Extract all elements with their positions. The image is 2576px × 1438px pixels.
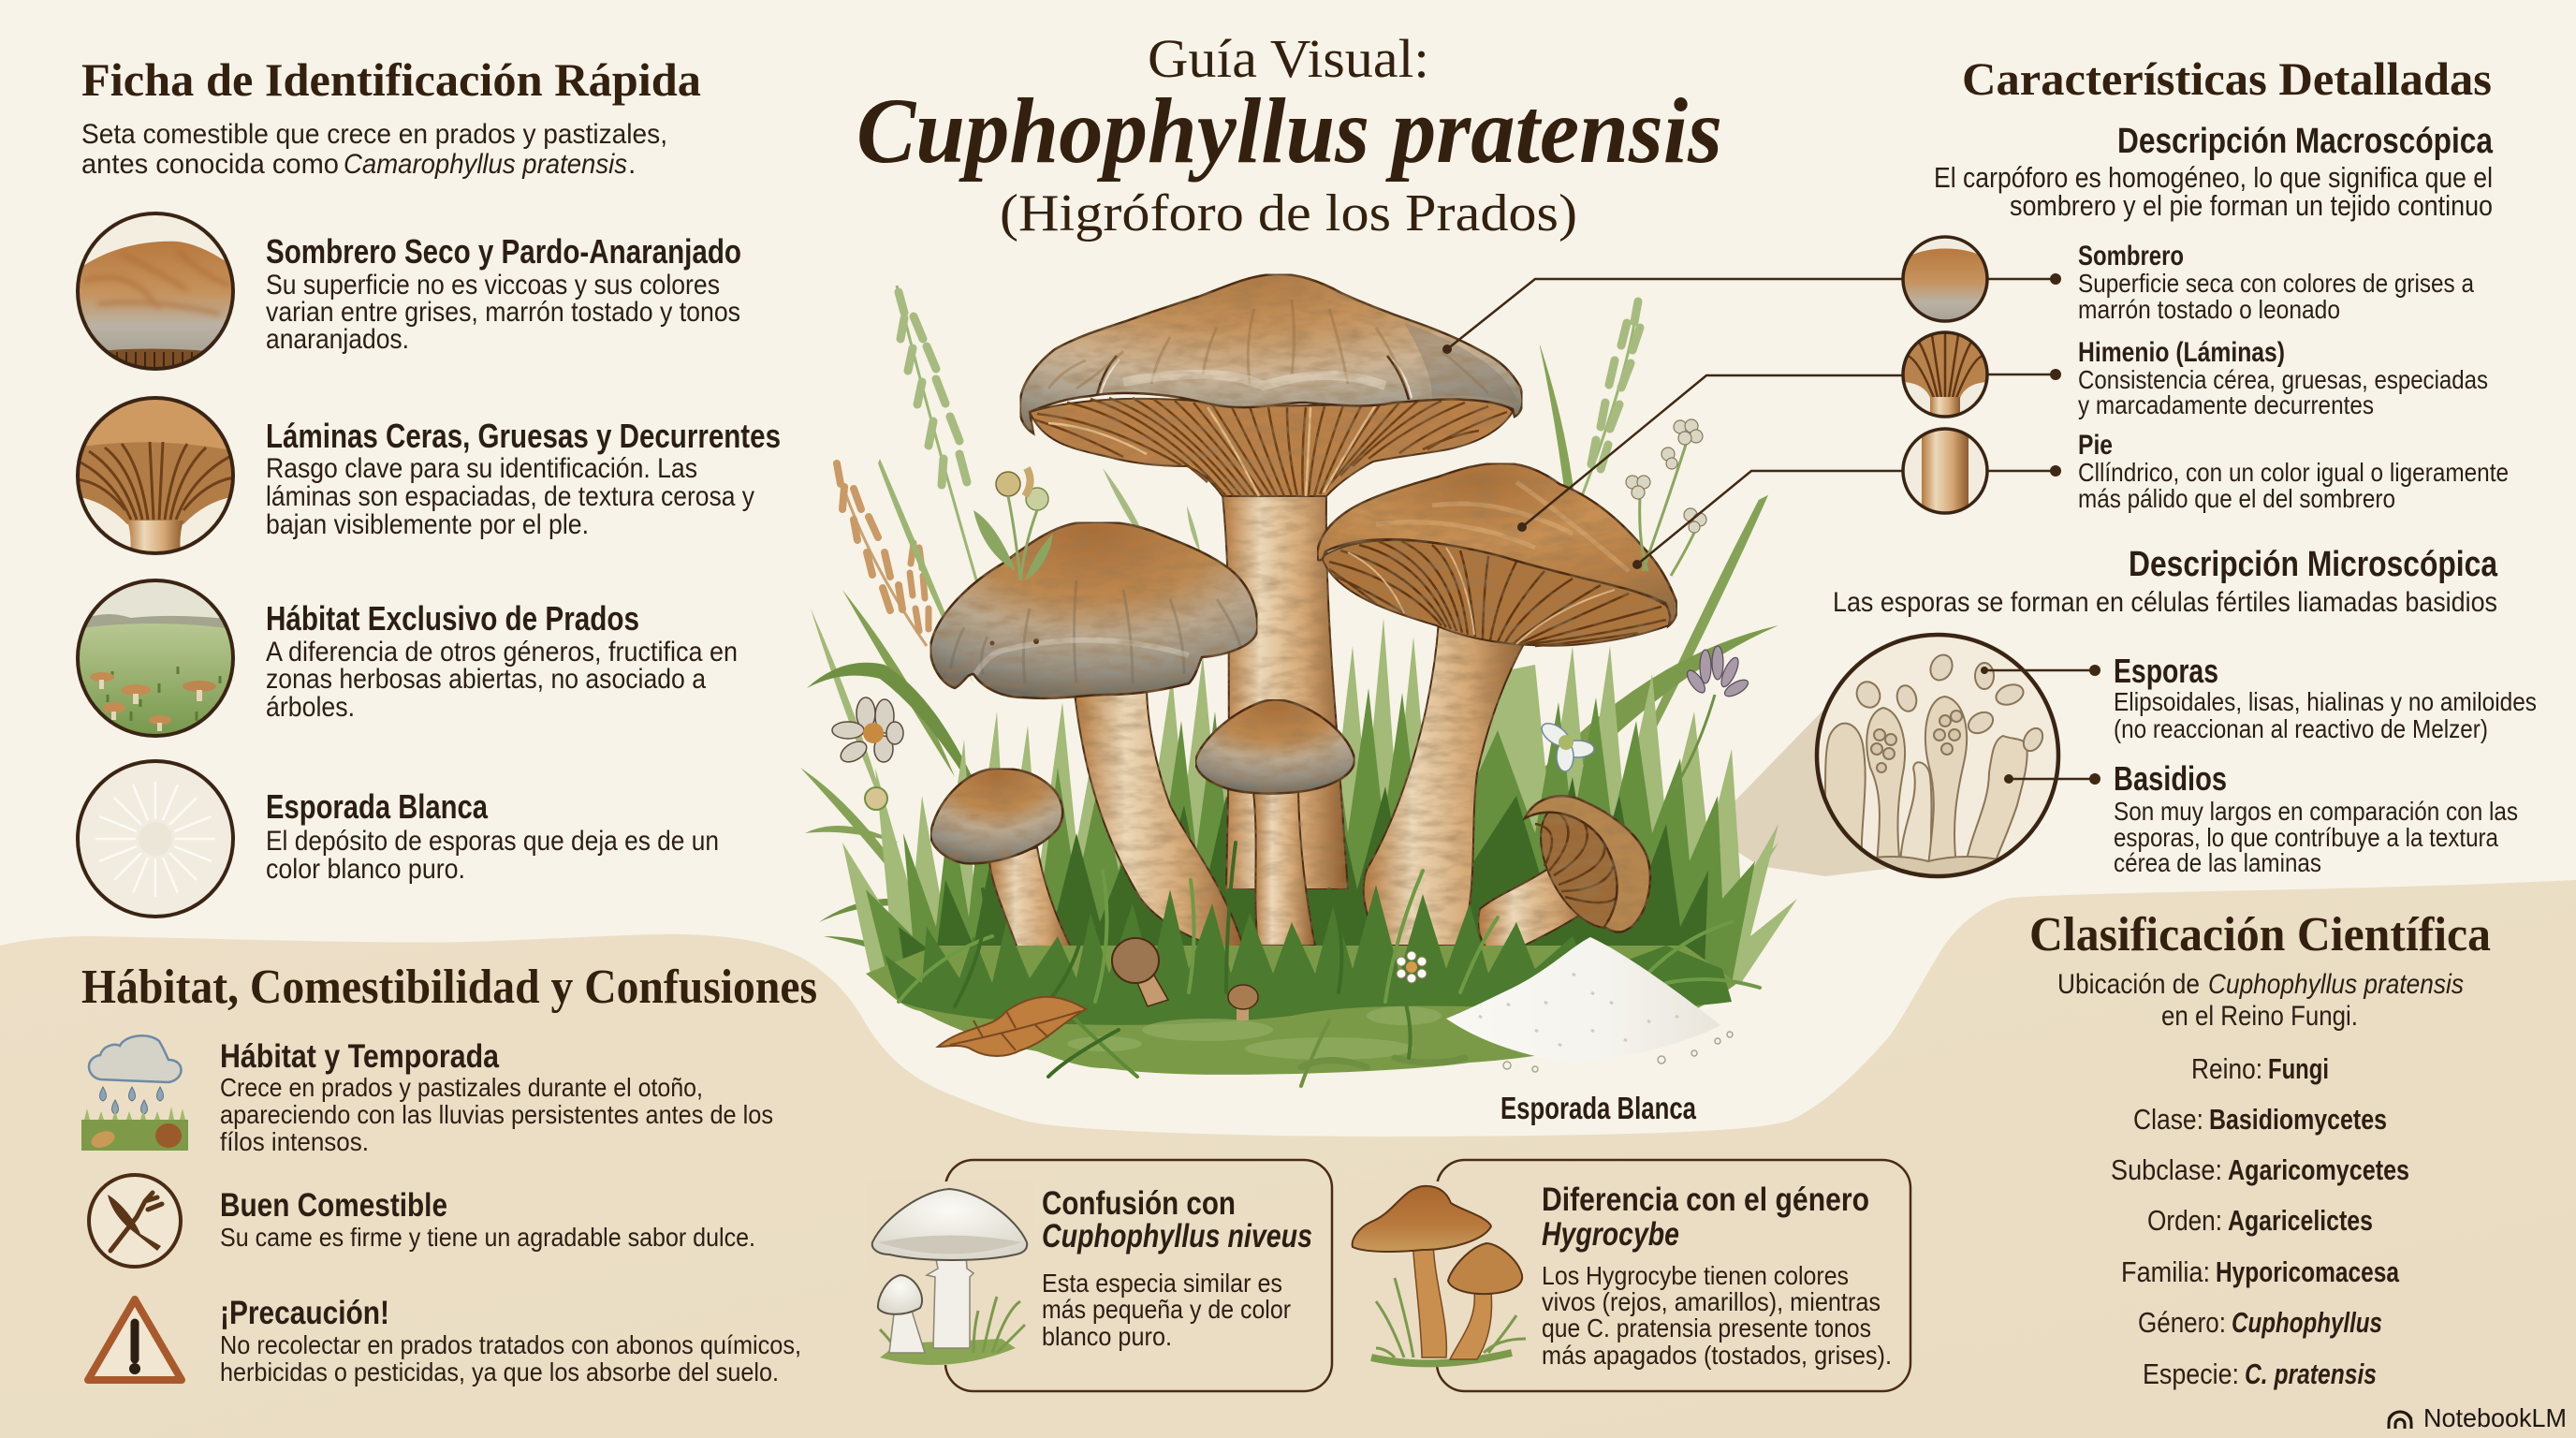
title: (Higróforo de los Prados) — [1000, 184, 1577, 242]
subheading: microscópica: Las esporas se forman en células fértiles liamadas basidios — [1833, 587, 2497, 618]
central illustration: group of mushrooms in grass — [800, 274, 1910, 1125]
intro: ubicación: en el Reino Fungi. — [2161, 1001, 2358, 1032]
rank: clase — [2133, 1103, 2387, 1136]
rank: subclase — [2111, 1153, 2409, 1186]
label: himenio: y marcadamente decurrentes — [2078, 390, 2374, 419]
dense grass silhouette: dark — [899, 777, 1708, 992]
text: diferencia: más apagados (tostados, grises). — [1542, 1341, 1892, 1370]
rank: reino: Reino: — [2191, 1052, 2262, 1085]
flowers and buds — [832, 419, 1750, 983]
label: himenio — [2078, 337, 2488, 419]
text: buen comestible: Buen Comestible — [220, 1187, 447, 1224]
intro: ubicación: Cuphophyllus pratensis — [2208, 969, 2464, 1000]
label: basidios: esporas, lo que contríbuye a la textura — [2114, 823, 2498, 852]
intro text: . — [628, 149, 636, 180]
icon: white mushrooms — [866, 1181, 1034, 1365]
text: confusión: Esta especia similar es — [1042, 1269, 1282, 1298]
text: diferencia: Los Hygrocybe tienen colores — [1542, 1261, 1849, 1290]
text: hábitat y temporada: apareciendo con las lluvias persistentes antes de los — [220, 1100, 773, 1129]
label: pie: Cllíndrico, con un color igual o ligeramente — [2078, 458, 2509, 487]
rank: clase: Basidiomycetes — [2209, 1103, 2387, 1136]
text: precaución: ¡Precaución! — [220, 1295, 389, 1331]
text: esporada blanca — [266, 787, 719, 885]
icon: warning triangle — [88, 1299, 182, 1380]
text: diferencia: vivos (rejos, amarillos), mientras — [1542, 1287, 1881, 1316]
intro text: Seta comestible que crece en prados y pastizales, — [81, 119, 667, 150]
heading: características: Características Detalladas — [1962, 52, 2492, 105]
subheading: microscópica: Descripción Microscópica — [2129, 545, 2498, 584]
rank: orden: Agaricelictes — [2228, 1204, 2373, 1237]
label: pie: Pie — [2078, 430, 2113, 461]
text: precaución: No recolectar en prados tratados con abonos químicos, — [220, 1330, 801, 1359]
subheading: macroscópica: Descripción Macroscópica — [2117, 122, 2494, 161]
text: confusión: blanco puro. — [1042, 1322, 1172, 1351]
subheading: macroscópica: El carpóforo es homogéneo, lo que significa que el — [1934, 161, 2493, 194]
rank: orden: Orden: — [2147, 1204, 2222, 1237]
text: sombrero seco: Sombrero Seco y Pardo-Anaranjado — [266, 232, 741, 271]
label: basidios: Son muy largos en comparación con las — [2114, 797, 2518, 826]
panel: diferencia con Hygrocybe — [1348, 1160, 1910, 1391]
label: sombrero: Superficie seca con colores de grises a — [2078, 269, 2474, 298]
text: hábitat exclusivo: zonas herbosas abiertas, no asociado a — [266, 664, 706, 695]
text: hábitat y temporada — [220, 1038, 773, 1156]
text: confusión — [1042, 1185, 1312, 1351]
leaf — [938, 997, 1086, 1056]
text: hábitat exclusivo: Hábitat Exclusivo de Prados — [266, 599, 639, 638]
detail circle: sombrero — [1900, 237, 1990, 328]
label: basidios — [2114, 759, 2518, 877]
label: sombrero: Sombrero — [2078, 241, 2184, 271]
text: láminas: Láminas Ceras, Gruesas y Decurrentes — [266, 417, 781, 455]
NotebookLM logo: NotebookLM — [2423, 1403, 2567, 1432]
icon: meadow thumbnail — [75, 580, 236, 740]
heading: hábitat: Hábitat, Comestibilidad y Confusiones — [81, 961, 817, 1014]
panel: características detalladas — [1442, 52, 2537, 899]
text: hábitat y temporada: Crece en prados y pastizales durante el otoño, — [220, 1073, 703, 1102]
text: buen comestible — [220, 1187, 755, 1252]
text: sombrero seco: anaranjados. — [266, 324, 409, 355]
rank: especie: Especie: — [2143, 1357, 2239, 1390]
text: confusión: Confusión con — [1042, 1185, 1236, 1222]
label: esporas — [2114, 652, 2537, 743]
detail circle: himenio — [1903, 332, 1987, 419]
text: hábitat exclusivo: árboles. — [266, 692, 355, 723]
panel: clasificación científica — [2029, 908, 2491, 1390]
text: hábitat exclusivo: A diferencia de otros géneros, fructifica en — [266, 637, 738, 668]
label: sombrero: marrón tostado o leonado — [2078, 295, 2340, 324]
label: sombrero — [2078, 241, 2474, 324]
panel: ficha de identificación rápida — [66, 53, 781, 917]
text: láminas — [266, 417, 781, 540]
title: Cuphophyllus pratensis — [856, 79, 1722, 183]
rank: especie: C. pratensis — [2245, 1357, 2377, 1390]
front moss and grass — [866, 843, 1760, 1086]
label: basidios: Basidios — [2114, 759, 2227, 798]
label: himenio: Consistencia cérea, gruesas, especiadas — [2078, 365, 2488, 394]
icon: brown mushrooms — [1348, 1181, 1532, 1365]
subheading: microscópica — [1833, 545, 2498, 618]
text: diferencia — [1542, 1181, 1892, 1370]
leader lines from mushrooms to detail circles — [1442, 273, 2061, 569]
mushroom: small centre — [1195, 699, 1354, 946]
text: sombrero seco: Su superficie no es viccoas y sus colores — [266, 270, 720, 301]
rank: familia: Hyporicomacesa — [2216, 1255, 2400, 1288]
text: hábitat exclusivo — [266, 599, 738, 723]
panel: hábitat, comestibilidad y confusiones — [81, 961, 817, 1387]
tiny mushrooms — [1112, 938, 1258, 1020]
text: láminas: láminas son espaciadas, de textura cerosa y — [266, 481, 754, 512]
text: diferencia: que C. pratensia presente tonos — [1542, 1313, 1871, 1343]
text: precaución: herbicidas o pesticidas, ya que los absorbe del suelo. — [220, 1357, 779, 1387]
heading: clasificación: Clasificación Científica — [2029, 908, 2491, 961]
text: hábitat y temporada: Hábitat y Temporada — [220, 1038, 499, 1075]
mushroom: small lower-left — [930, 769, 1075, 964]
text: precaución — [220, 1295, 801, 1387]
text: esporada blanca: color blanco puro. — [266, 854, 465, 885]
text: buen comestible: Su came es firme y tiene un agradable sabor dulce. — [220, 1223, 755, 1252]
rank: especie — [2143, 1357, 2377, 1390]
text: diferencia: Hygrocybe — [1542, 1216, 1679, 1253]
label: esporas: (no reaccionan al reactivo de Melzer) — [2114, 714, 2488, 743]
mushroom: back large — [1020, 274, 1522, 889]
rank: reino — [2191, 1052, 2329, 1085]
back grass and wild plants — [800, 286, 1797, 992]
wedge toward microscope view — [1705, 669, 1910, 876]
icon: rain cloud and ground — [81, 1035, 188, 1151]
background panels: habitat, confusions and classification — [0, 880, 2576, 1438]
panel: confusión con Cuphophyllus niveus — [866, 1160, 1332, 1391]
intro text: Camarophyllus pratensis — [344, 149, 627, 180]
icon: knife and fork — [89, 1175, 181, 1267]
rank: orden — [2147, 1204, 2373, 1237]
rank: reino: Fungi — [2268, 1052, 2329, 1085]
label: basidios: cérea de las laminas — [2114, 848, 2321, 877]
text: hábitat y temporada: fílos intensos. — [220, 1127, 369, 1156]
icon: cap thumbnail — [76, 212, 235, 371]
label: esporada blanca: Esporada Blanca — [1500, 1091, 1696, 1125]
icon: spore print thumbnail — [78, 761, 233, 917]
text: confusión: más pequeña y de color — [1042, 1295, 1291, 1324]
rank: género: Cuphophyllus — [2232, 1306, 2382, 1339]
rank: género: Género: — [2138, 1306, 2226, 1339]
rank: familia: Familia: — [2121, 1255, 2210, 1288]
microscope view: spores and basidia — [1817, 635, 2100, 899]
detail circle: pie — [1903, 426, 1987, 516]
text: esporada blanca: El depósito de esporas que deja es de un — [266, 826, 719, 857]
rank: subclase: Agaricomycetes — [2228, 1153, 2409, 1186]
icon: gills thumbnail — [75, 398, 236, 562]
text: esporada blanca: Esporada Blanca — [266, 787, 489, 826]
rank: subclase: Subclase: — [2111, 1153, 2222, 1186]
mushroom: lying right — [1478, 789, 1651, 958]
rank: familia — [2121, 1255, 2400, 1288]
intro text: antes conocida como — [81, 149, 339, 180]
subheading: macroscópica: sombrero y el pie forman un tejido continuo — [2010, 189, 2493, 222]
dense grass silhouette: medium — [866, 688, 1755, 983]
text: sombrero seco — [266, 232, 741, 355]
label: himenio: Himenio (Láminas) — [2078, 337, 2285, 368]
label: pie — [2078, 430, 2509, 513]
text: sombrero seco: varian entre grises, marrón tostado y tonos — [266, 297, 740, 328]
text: láminas: Rasgo clave para su identificación. Las — [266, 453, 697, 484]
rank: género — [2138, 1306, 2382, 1339]
label: esporas: Esporas — [2114, 652, 2218, 690]
intro text — [81, 119, 667, 180]
title — [856, 28, 1722, 242]
text: confusión: Cuphophyllus niveus — [1042, 1218, 1312, 1255]
title: Guía Visual: — [1148, 28, 1429, 89]
intro: ubicación — [2057, 969, 2464, 1032]
label: pie: más pálido que el del sombrero — [2078, 484, 2395, 513]
mushroom: left large — [930, 522, 1257, 947]
rank: clase: Clase: — [2133, 1103, 2203, 1136]
dense grass silhouette: light — [842, 618, 1797, 983]
mushroom: right large — [1317, 463, 1677, 946]
intro: ubicación: Ubicación de — [2057, 969, 2200, 1000]
text: diferencia: Diferencia con el género — [1542, 1181, 1869, 1218]
spore pile — [1446, 937, 1733, 1072]
text: láminas: bajan visiblemente por el ple. — [266, 509, 589, 540]
heading: ficha: Ficha de Identificación Rápida — [81, 53, 701, 106]
subheading: macroscópica — [1934, 122, 2494, 222]
